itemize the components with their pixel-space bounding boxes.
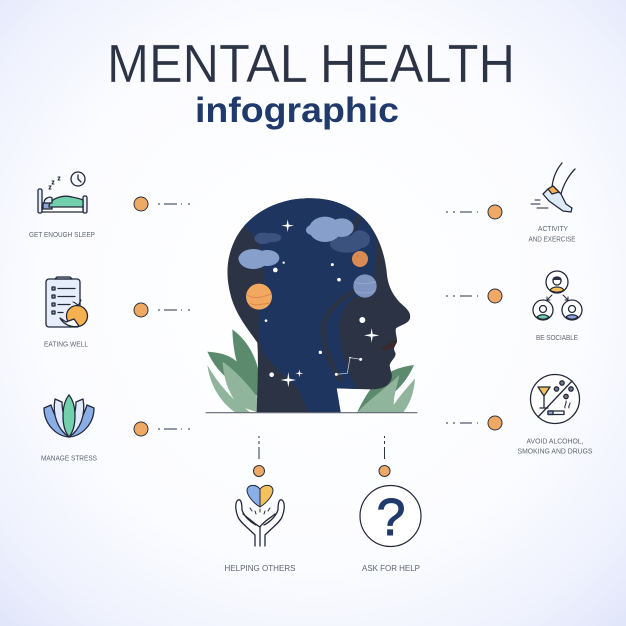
- label: helping: HELPING OTHERS: [224, 564, 296, 573]
- connector: stress: [134, 422, 190, 436]
- connector: helping: [254, 436, 264, 476]
- navy space region: [242, 193, 377, 412]
- connector: avoid: [446, 416, 502, 430]
- cloud left: [238, 249, 279, 269]
- label: activity: [528, 226, 576, 244]
- icon: bed and clock: [38, 172, 87, 213]
- connector: ask: [379, 436, 390, 476]
- connector: sociable: [446, 289, 502, 303]
- icon: lotus: [44, 395, 94, 437]
- label: ask: ASK FOR HELP: [362, 564, 420, 573]
- planet red: [352, 251, 368, 267]
- icon: question mark: [360, 486, 421, 547]
- label: activity: AND EXERCISE: [528, 236, 576, 244]
- left leaves: [207, 329, 259, 412]
- central head illustration: [206, 190, 420, 417]
- icon: running shoe: [531, 163, 575, 212]
- label: avoid: AVOID ALCOHOL,: [526, 438, 584, 446]
- subtitle: infographic: [195, 91, 399, 130]
- dark stripe: [323, 287, 362, 382]
- icon: question mark: ?: [377, 489, 405, 547]
- label: sleep: GET ENOUGH SLEEP: [29, 232, 95, 239]
- mouth: [381, 340, 397, 350]
- label: eating: EATING WELL: [44, 342, 88, 348]
- right leaves: [357, 365, 415, 412]
- planet orange: [246, 284, 272, 310]
- connector: sleep: [134, 197, 190, 211]
- connector: eating: [134, 303, 190, 317]
- icon: hands and heart: [236, 485, 284, 546]
- title: MENTAL HEALTH: [107, 34, 515, 94]
- icon: clipboard and orange: [46, 277, 88, 327]
- constellation: [335, 357, 362, 376]
- label: avoid: SMOKING AND DRUGS: [518, 448, 593, 456]
- dark cloud: [254, 230, 370, 253]
- cloud top: [306, 217, 354, 242]
- ground line: [206, 411, 417, 414]
- head silhouette: [227, 198, 410, 412]
- icon: people network: [533, 271, 582, 320]
- label: avoid: [518, 438, 593, 456]
- planet blue: [353, 274, 377, 298]
- label: activity: ACTIVITY: [538, 226, 568, 233]
- label: stress: MANAGE STRESS: [41, 456, 97, 462]
- connector: activity: [446, 205, 502, 219]
- stars: [265, 219, 379, 387]
- label: sociable: BE SOCIABLE: [536, 335, 578, 342]
- icon: no alcohol smoking drugs: [530, 374, 580, 424]
